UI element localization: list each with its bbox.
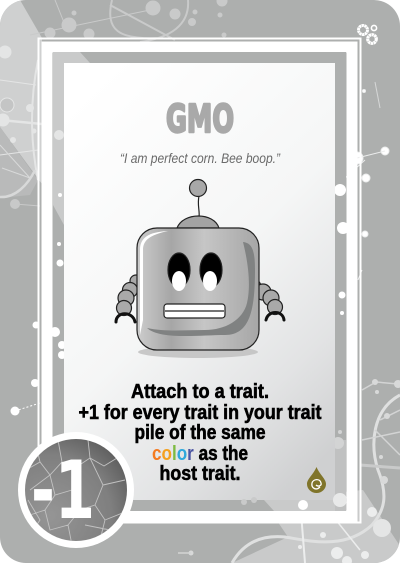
rules text: Attach to a trait.	[131, 381, 269, 403]
background pattern: molecules right	[345, 82, 389, 280]
frame splashes	[10, 130, 349, 449]
frame	[38, 38, 360, 522]
robot antenna	[177, 180, 219, 228]
robot mouth	[164, 304, 225, 318]
background pattern: DNA helix bottom right	[178, 379, 400, 563]
background pattern: molecules left	[0, 46, 42, 209]
rules text: host trait.	[160, 463, 240, 485]
background pattern: molecules top	[30, 0, 227, 42]
robot head	[137, 228, 259, 350]
robot eyes	[168, 253, 222, 291]
score badge	[18, 432, 134, 548]
robot shadow	[138, 346, 258, 358]
badge crackle texture	[26, 440, 125, 545]
icon: gears	[358, 25, 377, 43]
rules text: +1 for every trait in your trait	[78, 402, 322, 424]
splash over frame bottom	[241, 493, 347, 510]
rules text: pile of the same	[134, 422, 266, 444]
robot right arm	[245, 279, 284, 320]
title: GMO	[166, 97, 234, 141]
card paper panel	[64, 63, 335, 500]
icon: spiral drop	[307, 467, 326, 493]
robot left arm	[116, 275, 142, 322]
rules text	[78, 381, 322, 485]
robot illustration	[116, 180, 284, 358]
rules text: color as the	[152, 443, 248, 465]
score value: -1	[31, 444, 95, 537]
flavour quote: “I am perfect corn. Bee boop.”	[120, 150, 281, 166]
